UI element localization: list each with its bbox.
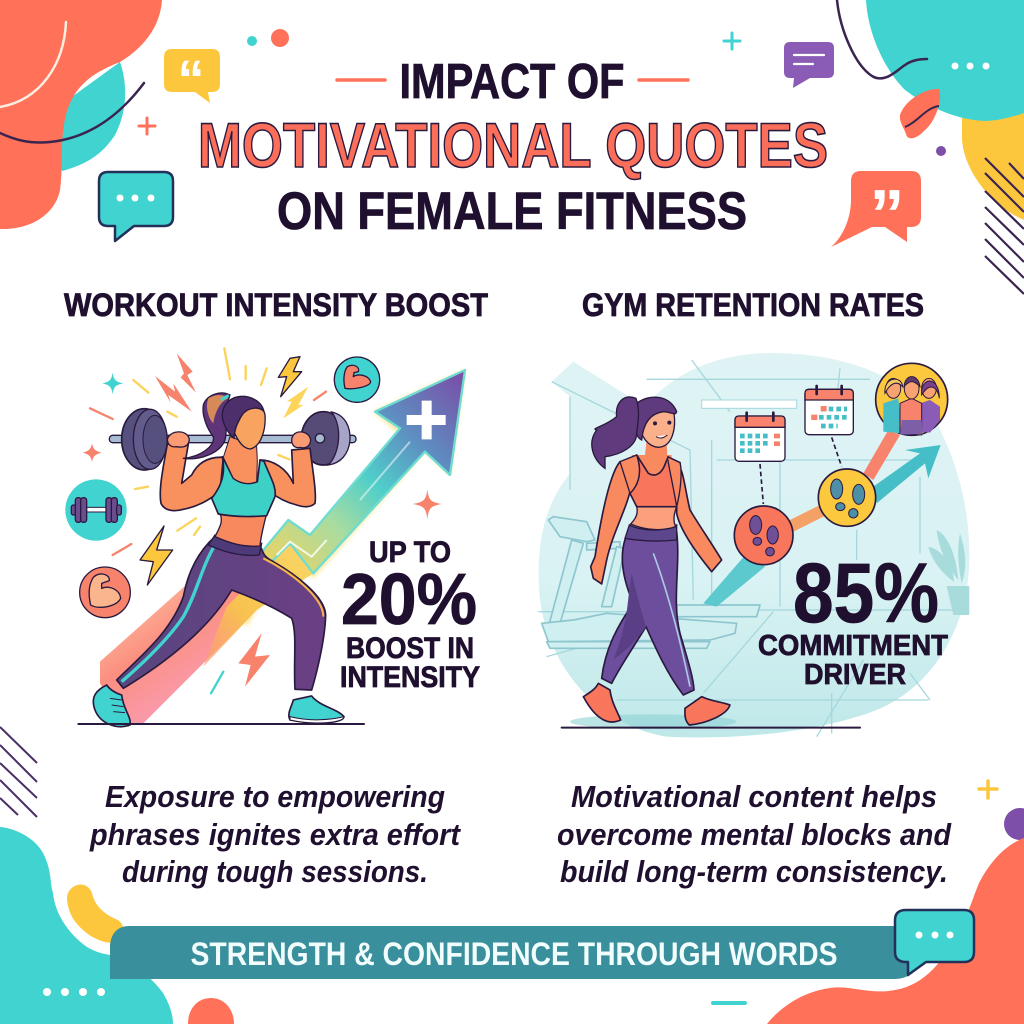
hands — [167, 432, 189, 447]
panel: gym illustration — [538, 353, 969, 737]
shoes — [93, 685, 130, 727]
top — [630, 455, 680, 507]
figure: woman lifting — [93, 393, 344, 727]
icon: coral quote bubble: ” — [870, 175, 904, 253]
decoration: top-right blobs — [837, 0, 1024, 294]
icon: purple message bubble — [784, 42, 834, 88]
gym background blob — [538, 353, 969, 737]
chest — [632, 455, 672, 480]
icon: yellow quote bubble — [164, 49, 220, 110]
neck — [223, 437, 257, 484]
text block: retention description: Motivational content helps — [571, 779, 937, 814]
heading: workout intensity boost: WORKOUT INTENSITY BOOST — [64, 287, 488, 323]
stat: up to 20%: INTENSITY — [340, 661, 480, 694]
decoration: bottom-right blobs — [713, 808, 1024, 1024]
ground line — [562, 725, 860, 731]
title: ON FEMALE FITNESS — [277, 182, 747, 241]
text block: retention description: build long-term consistency. — [560, 854, 948, 889]
arrow: rising commitment — [703, 430, 941, 607]
stat: 85% commitment driver: DRIVER — [804, 659, 906, 691]
heading: gym retention rates: GYM RETENTION RATES — [582, 287, 924, 323]
title: IMPACT OF — [400, 55, 624, 109]
arms — [591, 462, 632, 584]
icon: banner chat bubble — [895, 910, 974, 975]
stat: up to 20%: UP TO — [369, 536, 451, 569]
legs — [602, 528, 694, 695]
hair — [634, 397, 677, 440]
icon: coral flexed arm — [80, 567, 130, 618]
text block: workout description: phrases ignites extra effort — [89, 817, 462, 852]
face — [233, 407, 265, 449]
stat: 85% commitment driver — [758, 546, 948, 691]
stat: up to 20% — [340, 536, 480, 694]
midriff — [631, 507, 677, 530]
text block: retention description: overcome mental blocks and — [557, 817, 952, 852]
ponytail — [183, 393, 230, 459]
decoration: small sparkles and dots — [139, 29, 997, 798]
arms — [160, 444, 223, 511]
figure: woman walking — [570, 397, 737, 729]
arrow: rising intensity — [100, 370, 465, 723]
icon: teal flexed arm — [334, 357, 380, 402]
icon: group of women — [876, 363, 948, 435]
ground shadow — [570, 714, 737, 729]
icon: coral quote bubble — [831, 171, 921, 253]
stat: 85% commitment driver: 85% — [793, 546, 939, 640]
stat: 85% commitment driver: COMMITMENT — [758, 630, 948, 662]
icon: sparks and bolts — [83, 348, 442, 693]
rear leg and tights — [117, 537, 326, 690]
icon: dumbbell circle — [65, 479, 127, 541]
text block: workout description: Exposure to empowering — [105, 779, 445, 814]
title — [198, 55, 828, 241]
decoration: top-left blobs — [0, 0, 162, 229]
decoration: bottom-left blobs — [0, 727, 234, 1024]
panel: workout illustration — [65, 348, 465, 727]
icon: yellow footsteps — [818, 469, 876, 526]
sports bra — [212, 457, 275, 517]
icon: yellow quote bubble: “ — [178, 50, 204, 110]
neck and face — [645, 440, 667, 468]
icon: coral footsteps — [734, 506, 793, 565]
shoes — [583, 683, 621, 722]
banner: strength and confidence: STRENGTH & CONFIDENCE THROUGH WORDS — [190, 936, 838, 972]
text block: workout description: during tough sessions. — [122, 854, 428, 889]
text block: workout description — [89, 779, 462, 889]
icon: calendar 1 — [735, 413, 785, 504]
hair — [222, 396, 264, 438]
icon: teal chat bubble — [99, 172, 173, 241]
text block: retention description — [557, 779, 952, 889]
icon: calendar 2 — [805, 386, 853, 467]
title: MOTIVATIONAL QUOTES — [198, 111, 828, 181]
stat: up to 20%: 20% — [341, 560, 477, 640]
ground line — [78, 721, 364, 727]
stat: up to 20%: BOOST IN — [346, 632, 474, 665]
midriff — [215, 513, 267, 546]
banner: strength and confidence — [110, 926, 920, 979]
barbell — [109, 409, 356, 470]
treadmill — [542, 517, 760, 648]
